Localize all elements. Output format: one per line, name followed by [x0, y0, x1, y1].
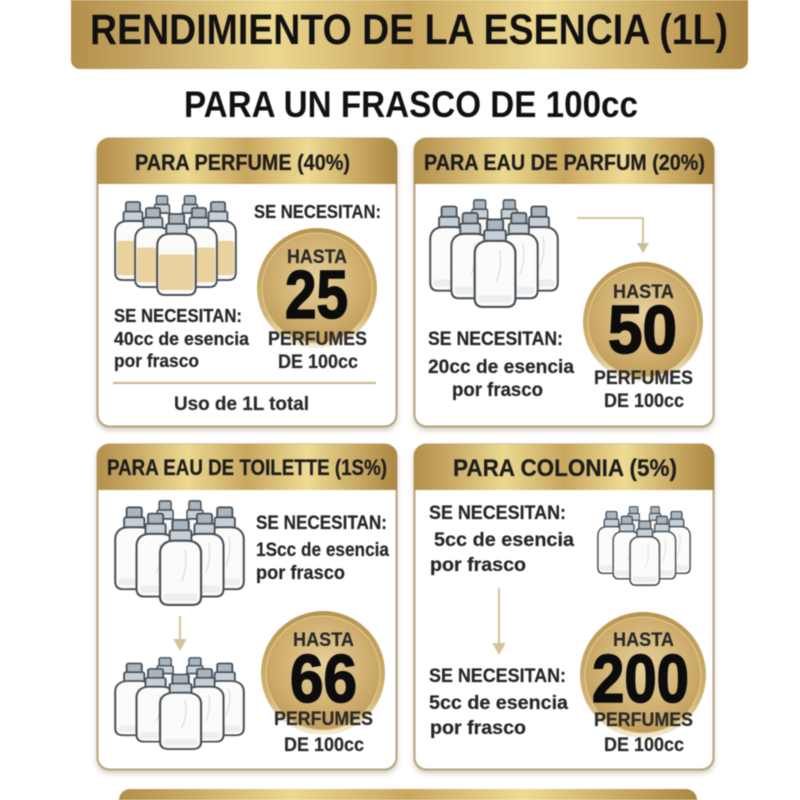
- essence text: [428, 328, 574, 401]
- essence text: 20cc de esencia: [428, 356, 574, 378]
- panel: para perfume: [97, 138, 397, 430]
- essence text: SE NECESITAN:: [114, 306, 242, 326]
- panel heading: PARA EAU DE PARFUM (20%): [424, 150, 705, 175]
- panel: para eau de parfum: [414, 138, 714, 430]
- essence text bottom: SE NECESITAN:: [429, 665, 566, 687]
- gold badge 200: 200: [592, 641, 689, 717]
- essence text: por frasco: [114, 351, 199, 371]
- essence text bottom: [429, 665, 568, 739]
- badge caption: [274, 709, 373, 756]
- essence text: [256, 512, 389, 584]
- essence text: por frasco: [452, 379, 543, 401]
- gold badge 50: HASTA: [613, 282, 674, 303]
- panel: para eau de toilette: [97, 444, 397, 773]
- gold badge 66: 66: [290, 641, 357, 717]
- gold badge 50: [583, 262, 703, 382]
- essence text: 40cc de esencia: [114, 329, 250, 349]
- essence text top: SE NECESITAN:: [429, 502, 566, 524]
- title banner: [71, 0, 748, 69]
- icon: bottles top: [115, 501, 244, 605]
- panel heading: PARA EAU DE TOILETTE (1S%): [107, 455, 387, 480]
- gold badge 200: HASTA: [613, 630, 674, 651]
- panel header: [414, 138, 714, 184]
- essence text bottom: 5cc de esencia: [429, 692, 568, 714]
- badge caption: [268, 329, 367, 373]
- gold badge 25: [257, 228, 377, 348]
- arrow: [494, 588, 504, 653]
- panel heading: PARA COLONIA (5%): [453, 455, 677, 482]
- badge caption: [594, 368, 693, 412]
- badge caption: DE 100cc: [604, 391, 684, 412]
- essence text: por frasco: [256, 562, 345, 584]
- gold badge 200: [580, 612, 706, 738]
- title text: RENDIMIENTO DE LA ESENCIA (1L): [90, 6, 728, 54]
- subtitle: PARA UN FRASCO DE 100cc: [184, 84, 638, 125]
- arrow: [175, 616, 185, 649]
- badge caption: DE 100cc: [604, 735, 684, 756]
- icon: bottles: [430, 200, 558, 307]
- gold badge 66: [261, 611, 385, 735]
- gold badge 25: HASTA: [287, 247, 347, 268]
- essence text: SE NECESITAN:: [256, 512, 387, 534]
- arrow: [577, 218, 649, 253]
- bottom gold banner: [119, 789, 697, 800]
- badge caption: [594, 710, 693, 756]
- gold badge 25: 25: [285, 257, 348, 333]
- essence text top: por frasco: [430, 554, 526, 576]
- badge caption: PERFUMES: [274, 709, 373, 730]
- panel header: [414, 444, 714, 490]
- essence text: [114, 306, 250, 371]
- badge caption: PERFUMES: [594, 368, 693, 389]
- essence text top: 5cc de esencia: [434, 529, 574, 551]
- badge caption: DE 100cc: [278, 352, 358, 373]
- icon: bottles bottom: [115, 658, 244, 749]
- essence text: SE NECESITAN:: [428, 328, 563, 350]
- essence text bottom: por frasco: [430, 717, 526, 739]
- essence text: 1Scc de esencia: [256, 539, 389, 561]
- gold badge 50: 50: [608, 292, 677, 368]
- gold badge 66: HASTA: [293, 630, 354, 651]
- total use note: Uso de 1L total: [174, 394, 309, 415]
- panel: para colonia: [414, 444, 714, 773]
- panel header: [97, 444, 397, 490]
- panel header: [97, 138, 397, 184]
- label: se necesitan: SE NECESITAN:: [254, 202, 381, 222]
- essence text top: [429, 502, 574, 576]
- badge caption: PERFUMES: [594, 710, 693, 731]
- badge caption: DE 100cc: [284, 735, 364, 756]
- badge caption: PERFUMES: [268, 329, 367, 350]
- panel heading: PARA PERFUME (40%): [135, 150, 350, 175]
- icon: bottles: [598, 507, 690, 585]
- icon: bottles half filled: [115, 196, 236, 295]
